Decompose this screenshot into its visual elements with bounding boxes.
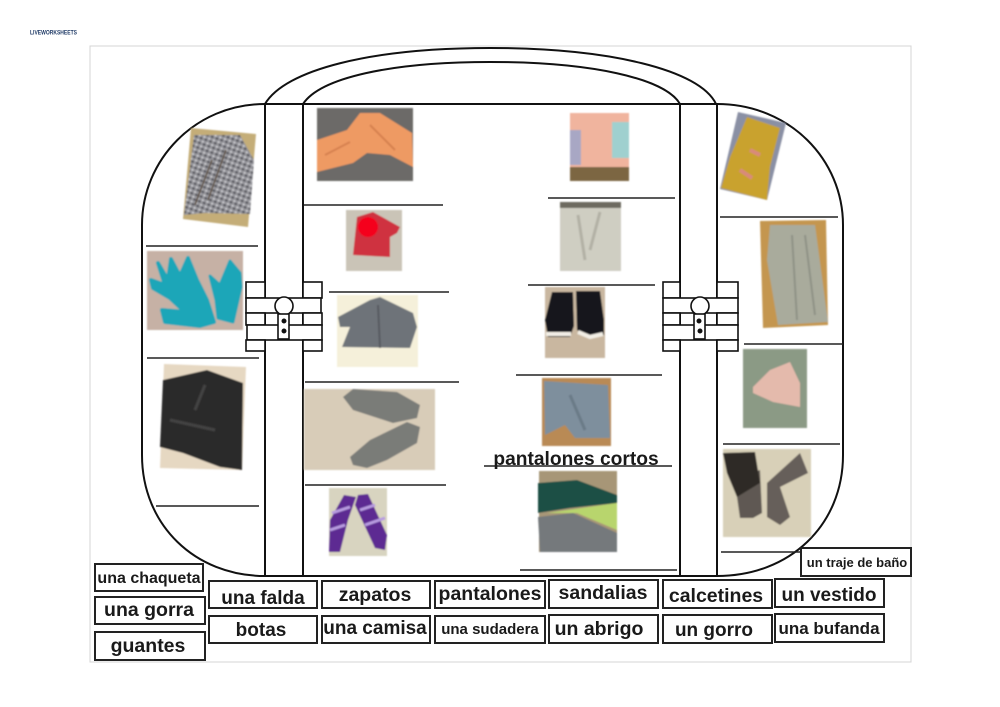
word card: un vestido bbox=[775, 579, 884, 607]
suitcase outline bbox=[142, 48, 843, 576]
photo: gloves bbox=[147, 251, 243, 330]
word card: zapatos: zapatos bbox=[339, 584, 411, 606]
word card: una bufanda: una bufanda bbox=[778, 619, 880, 638]
answer lines bbox=[146, 198, 843, 570]
word card: un gorro: un gorro bbox=[675, 620, 753, 641]
word card: botas bbox=[209, 616, 317, 643]
word card: pantalones cortos: pantalones cortos bbox=[493, 449, 659, 470]
word card: un traje de baño bbox=[801, 548, 911, 576]
photo: grey jacket bbox=[337, 295, 418, 367]
word card: guantes: guantes bbox=[111, 635, 186, 657]
worksheet sheet bbox=[90, 46, 911, 662]
word card: calcetines bbox=[663, 580, 772, 608]
photo: yellow dress bbox=[720, 112, 786, 200]
word card: una falda bbox=[209, 581, 317, 609]
word card: pantalones: pantalones bbox=[439, 583, 542, 605]
word card: sandalias: sandalias bbox=[559, 582, 648, 604]
photo: long skirt bbox=[760, 220, 828, 328]
word card: una bufanda bbox=[775, 614, 884, 642]
right buckle bbox=[663, 282, 738, 351]
photo: pastel shirt bbox=[570, 113, 629, 181]
word card: sandalias bbox=[549, 580, 658, 608]
photo: skirt bbox=[183, 128, 256, 227]
photo: shorts bbox=[542, 378, 611, 446]
word card: un vestido: un vestido bbox=[781, 585, 877, 606]
word card: zapatos bbox=[322, 581, 430, 608]
word card: una sudadera: una sudadera bbox=[441, 621, 539, 638]
word card: una gorra bbox=[95, 597, 205, 624]
photo: red cap bbox=[346, 210, 402, 271]
word card: un abrigo: un abrigo bbox=[555, 618, 644, 640]
photo: jacket bbox=[160, 364, 246, 470]
word card: guantes bbox=[95, 632, 205, 660]
word card: un gorro bbox=[663, 615, 772, 643]
photo: swimsuit bbox=[538, 471, 617, 552]
word card: botas: botas bbox=[236, 620, 286, 641]
photo: beanie bbox=[743, 349, 807, 428]
logo: LIVEWORKSHEETS bbox=[30, 30, 77, 36]
word card: un traje de baño: un traje de baño bbox=[807, 555, 907, 570]
word card: una camisa: una camisa bbox=[323, 618, 427, 639]
photo: sneakers bbox=[545, 287, 605, 358]
word card: una falda: una falda bbox=[221, 588, 305, 609]
word card: una chaqueta: una chaqueta bbox=[97, 570, 201, 587]
photo: light sweater bbox=[560, 202, 621, 271]
photo: socks bbox=[329, 488, 387, 556]
left buckle bbox=[246, 282, 322, 351]
photo: flip-flops bbox=[304, 389, 435, 470]
word card: una sudadera bbox=[435, 616, 545, 643]
word card: un abrigo bbox=[549, 615, 658, 643]
word card: una gorra: una gorra bbox=[104, 599, 194, 621]
photo: boots bbox=[723, 449, 811, 537]
photo: orange scarf bbox=[317, 108, 413, 181]
word card: una chaqueta bbox=[95, 564, 203, 591]
word card: calcetines: calcetines bbox=[669, 585, 763, 607]
